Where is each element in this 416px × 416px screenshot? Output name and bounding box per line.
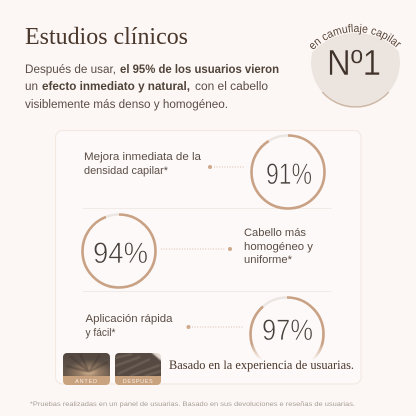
badge: Nº1 en camuflaje capilar: en camuflaje capilar <box>310 24 402 49</box>
row: cabello homogéneo 94%: 94% <box>93 237 148 270</box>
row: densidad capilar 91%: 91% <box>266 158 312 191</box>
row: densidad capilar 91% <box>84 136 324 208</box>
photo: después <box>115 353 161 385</box>
row: cabello homogéneo 94%: homogéneo y <box>244 241 314 253</box>
badge: Nº1 en camuflaje capilar <box>310 24 402 108</box>
photo: antes <box>63 353 110 385</box>
intro text block: visiblemente más denso y homogéneo. <box>25 99 228 111</box>
footnote: *Pruebas realizadas en un panel de usuarias. Basado en sus devoluciones e reseñas de usuarias. <box>30 401 355 408</box>
badge: Nº1 en camuflaje capilar: Nº1 <box>327 42 381 83</box>
intro text block: efecto inmediato y natural, <box>42 81 190 93</box>
intro text block: Después de usar, <box>25 64 116 76</box>
intro text block <box>25 64 279 111</box>
row: densidad capilar 91%: densidad capilar* <box>84 165 169 177</box>
caption: Basado en la experiencia de usuarias. <box>169 358 354 372</box>
row: aplicación rápida 97%: y fácil* <box>86 327 116 339</box>
intro text block: con el cabello <box>195 81 268 93</box>
row: aplicación rápida 97%: 97% <box>262 314 313 347</box>
photo: después: DESPUES <box>123 379 153 385</box>
row: cabello homogéneo 94%: uniforme* <box>244 254 293 266</box>
row: densidad capilar 91%: Mejora inmediata de la <box>84 151 202 163</box>
row: aplicación rápida 97%: Aplicación rápida <box>86 313 173 325</box>
title: Estudios clínicos <box>25 24 188 50</box>
intro text block: un <box>25 81 38 93</box>
row: aplicación rápida 97% <box>86 298 329 376</box>
row: cabello homogéneo 94%: Cabello más <box>244 227 307 239</box>
row: cabello homogéneo 94% <box>82 214 314 288</box>
intro text block: el 95% de los usuarios vieron <box>120 64 279 76</box>
photo: antes: ANTED <box>75 379 98 385</box>
panel: results card <box>56 130 361 385</box>
